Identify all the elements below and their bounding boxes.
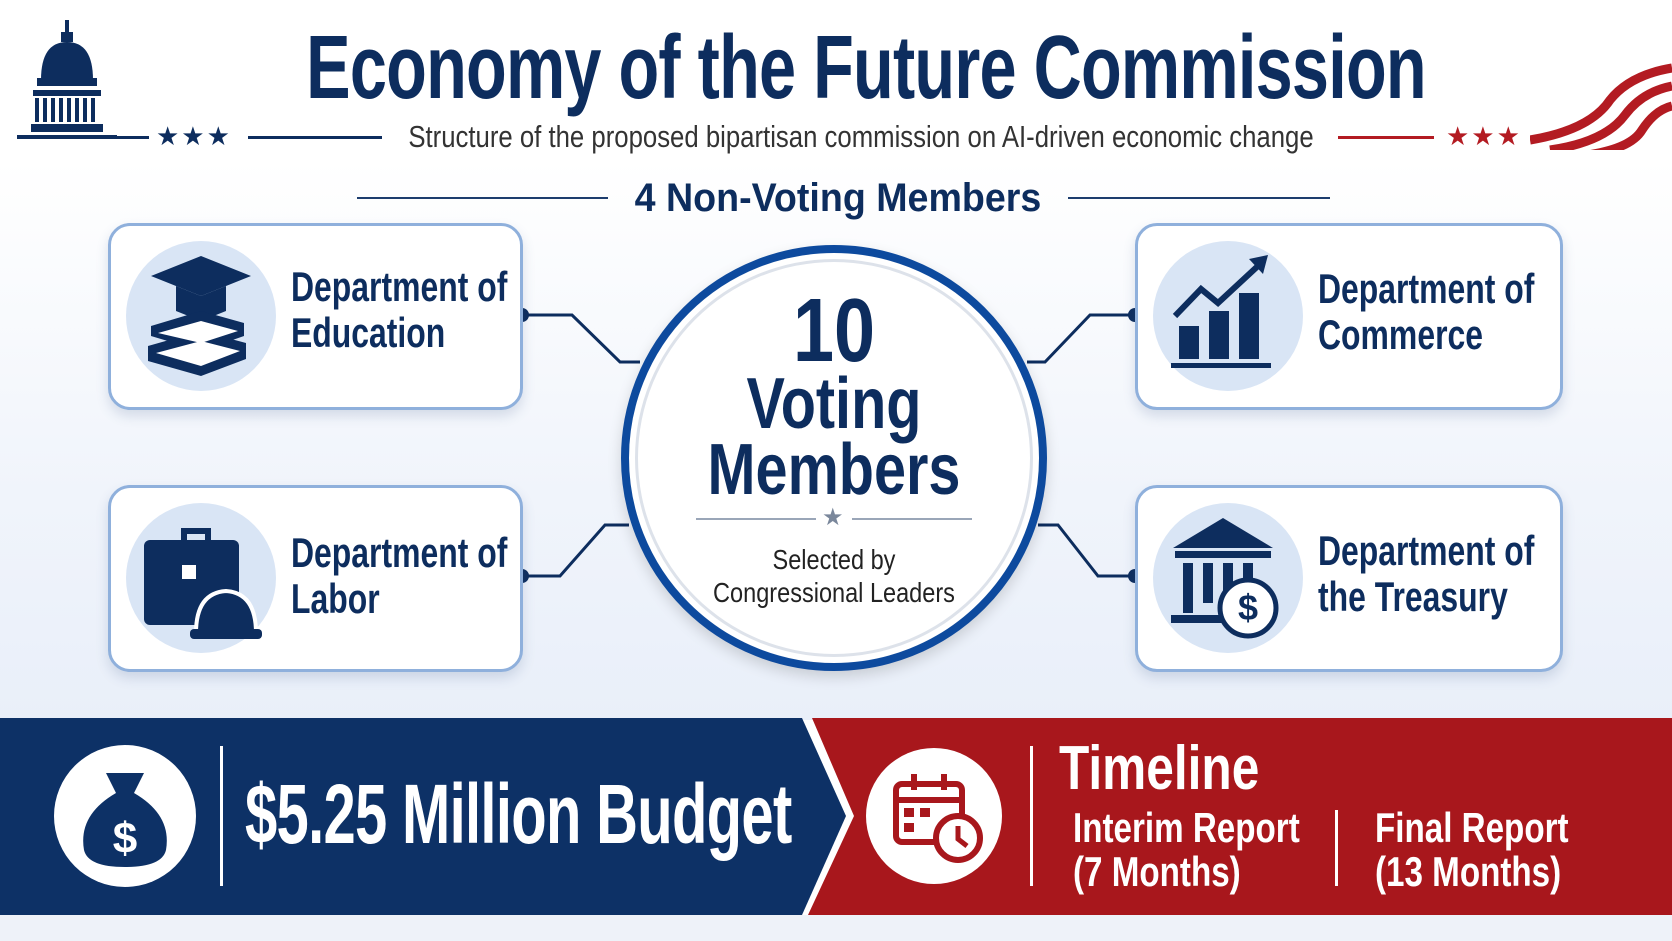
- budget text: $5.25 Million Budget: [245, 767, 792, 861]
- panel: treasury: [1135, 485, 1563, 672]
- icon: bank dollar: [1153, 503, 1303, 653]
- panel: labor: Department of: [291, 529, 507, 576]
- icon: grad cap books: [126, 241, 276, 391]
- text: 4 Non-Voting Members: [635, 176, 1041, 220]
- panel: education: Education: [291, 309, 445, 356]
- panel: labor: [108, 485, 523, 672]
- text: ★★★: [1446, 121, 1522, 151]
- center circle: voting members: Members: [708, 430, 960, 510]
- icon: money bag: [54, 745, 196, 887]
- heading: non-voting: [357, 197, 608, 199]
- interim report: [1073, 804, 1300, 895]
- final report: Final Report: [1375, 804, 1569, 851]
- bottom band: [0, 718, 1672, 941]
- text: ★★★: [156, 121, 232, 151]
- title: Economy of the Future Commission: [306, 18, 1426, 118]
- icon: flag stripes: [1530, 64, 1672, 150]
- decorative left line and stars: [17, 136, 149, 139]
- center circle: voting members: ★: [822, 504, 844, 531]
- final report: (13 Months): [1375, 848, 1561, 895]
- panel: education: [108, 223, 523, 410]
- panel: treasury: the Treasury: [1318, 573, 1508, 620]
- center circle: voting members: [621, 245, 1047, 671]
- icon: capitol: [17, 20, 117, 136]
- subtitle: Structure of the proposed bipartisan commission on AI-driven economic change: [408, 119, 1314, 154]
- panel: education: Department of: [291, 263, 507, 310]
- timeline block: [866, 734, 1569, 895]
- budget block: [54, 745, 792, 887]
- panel: commerce: Commerce: [1318, 311, 1483, 358]
- timeline heading: Timeline: [1059, 734, 1259, 803]
- center circle: voting members: Voting: [747, 364, 921, 444]
- icon: growth chart: [1153, 241, 1303, 391]
- interim report: (7 Months): [1073, 848, 1241, 895]
- panel: labor: Labor: [291, 575, 380, 622]
- final report: [1375, 804, 1569, 895]
- panel: treasury: Department of: [1318, 527, 1534, 574]
- icon: money bag: $: [113, 814, 137, 863]
- center circle: voting members: Selected by: [773, 544, 895, 575]
- center circle: voting members: Congressional Leaders: [713, 577, 955, 608]
- interim report: Interim Report: [1073, 804, 1300, 851]
- panel: commerce: Department of: [1318, 265, 1534, 312]
- icon: briefcase helmet: [126, 503, 276, 653]
- icon: calendar clock: [866, 748, 1002, 884]
- panel: commerce: [1135, 223, 1563, 410]
- center circle: voting members: 10: [793, 281, 875, 381]
- icon: bank dollar: $: [1238, 587, 1258, 628]
